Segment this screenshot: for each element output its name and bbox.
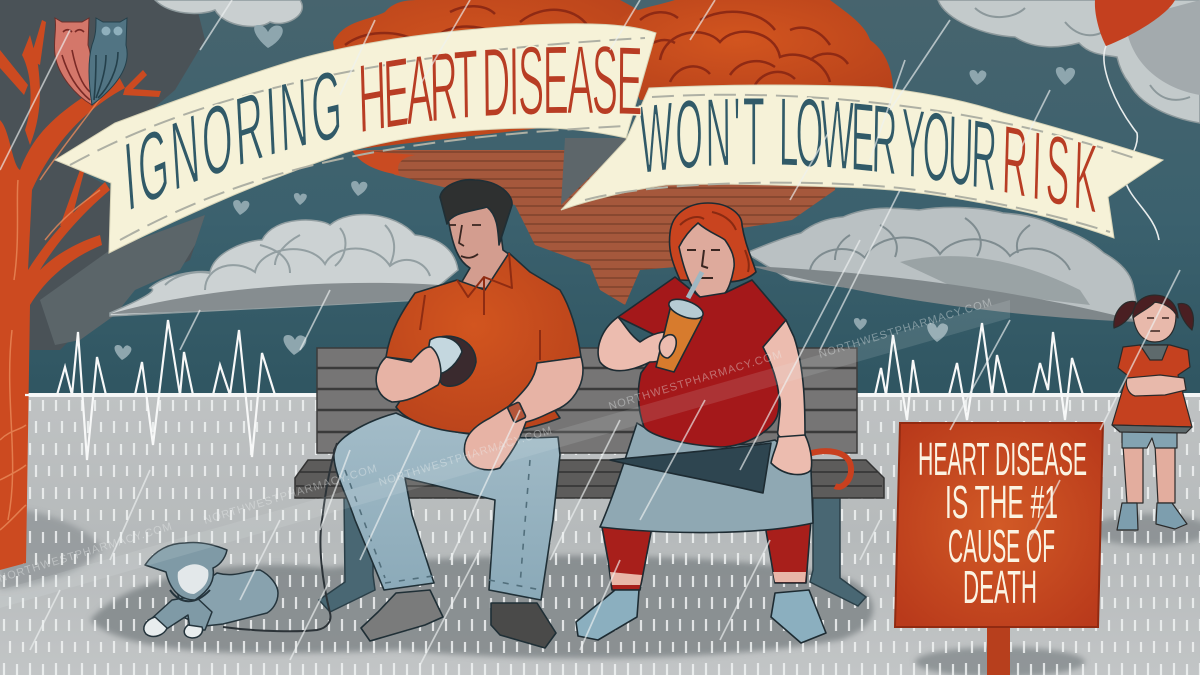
horizon line — [0, 393, 1200, 397]
man — [334, 180, 583, 648]
sign post — [987, 625, 1010, 675]
dog head — [145, 542, 227, 600]
woman: face — [679, 223, 734, 298]
girl: crossed arms — [1126, 375, 1186, 396]
sign text — [918, 433, 1087, 613]
watermark — [0, 296, 1010, 608]
woman: hair waves — [680, 212, 749, 272]
man: hair — [440, 180, 512, 245]
watermark: NORTHWESTPHARMACY.COM — [202, 462, 379, 527]
woman: skirt — [600, 423, 813, 533]
owl: pink — [54, 18, 92, 105]
ground — [0, 396, 1200, 675]
woman: arm and hand — [598, 317, 676, 371]
sky hearts — [115, 25, 1075, 360]
bench seat — [295, 460, 884, 498]
tree canopy: red upper — [333, 0, 893, 150]
girl: shoes — [1117, 503, 1187, 530]
sign text: IS THE #1 — [945, 476, 1058, 528]
dog body — [175, 570, 278, 626]
left tree trunk and branches — [0, 20, 161, 570]
watermark: NORTHWESTPHARMACY.COM — [377, 424, 554, 489]
dog muzzle — [178, 564, 208, 594]
girl — [1112, 295, 1193, 530]
man: jeans — [334, 413, 560, 600]
woman: shirt — [618, 277, 786, 447]
ground rain dashes — [0, 400, 1200, 675]
sign text: DEATH — [963, 561, 1037, 613]
dark foliage behind tree — [0, 0, 205, 350]
girl: head — [1133, 302, 1176, 342]
watermark: NORTHWESTPHARMACY.COM — [607, 348, 784, 413]
woman: right arm — [763, 320, 805, 438]
heartbeat line left — [25, 320, 315, 460]
park bench — [295, 348, 884, 612]
banner two heading: WON'T LOWER YOUR RISK — [638, 97, 1098, 212]
girl: shorts — [1122, 430, 1177, 448]
ground shadows — [0, 509, 1200, 675]
watermark: NORTHWESTPHARMACY.COM — [0, 520, 174, 585]
man: watch — [507, 402, 526, 423]
man: left arm — [376, 347, 441, 402]
sign: heart disease is the number one cause of death — [895, 423, 1103, 675]
cloud: top left — [155, 0, 302, 26]
watermark: NORTHWESTPHARMACY.COM — [817, 296, 994, 361]
dog — [144, 443, 337, 638]
man: boots — [361, 590, 443, 641]
sign text: CAUSE OF — [948, 520, 1055, 572]
girl: frill — [1112, 425, 1192, 433]
dog leash — [223, 443, 337, 631]
cloud: right — [746, 207, 1142, 322]
dog collar — [170, 590, 210, 601]
dog front legs — [150, 596, 212, 630]
woman — [576, 203, 851, 643]
owls — [54, 18, 127, 105]
banner two — [560, 84, 1164, 239]
man: shirt — [386, 253, 581, 434]
owl: blue — [89, 18, 127, 105]
sky background — [0, 0, 1200, 400]
bench back — [317, 348, 857, 453]
girl: legs — [1123, 445, 1175, 503]
girl: hair — [1114, 295, 1193, 330]
cloud: left — [110, 215, 458, 316]
banner fold — [561, 138, 630, 205]
woman: shoes — [576, 590, 639, 640]
woman: red leggings — [602, 527, 652, 590]
balloon heart — [1095, 0, 1175, 240]
man: doughnut — [430, 336, 476, 386]
woman: drink cup — [656, 272, 706, 372]
tree bark lines — [0, 85, 110, 530]
dog paws — [144, 617, 203, 638]
banner one — [54, 23, 657, 254]
tree canopy: brown lower — [352, 150, 835, 305]
woman: hand on umbrella — [771, 435, 812, 475]
cloud: top right — [938, 0, 1200, 123]
woman: umbrella — [610, 443, 851, 493]
banner one heading: IGNORING HEART DISEASE — [126, 45, 642, 210]
woman: hair back — [669, 203, 756, 282]
sign board — [895, 423, 1103, 627]
heartbeat line right — [860, 323, 1125, 420]
girl: neck collar — [1140, 345, 1168, 360]
girl: dress — [1112, 345, 1192, 427]
bench legs — [319, 495, 866, 612]
man: right arm — [464, 357, 583, 470]
man: neck and face — [447, 196, 510, 290]
